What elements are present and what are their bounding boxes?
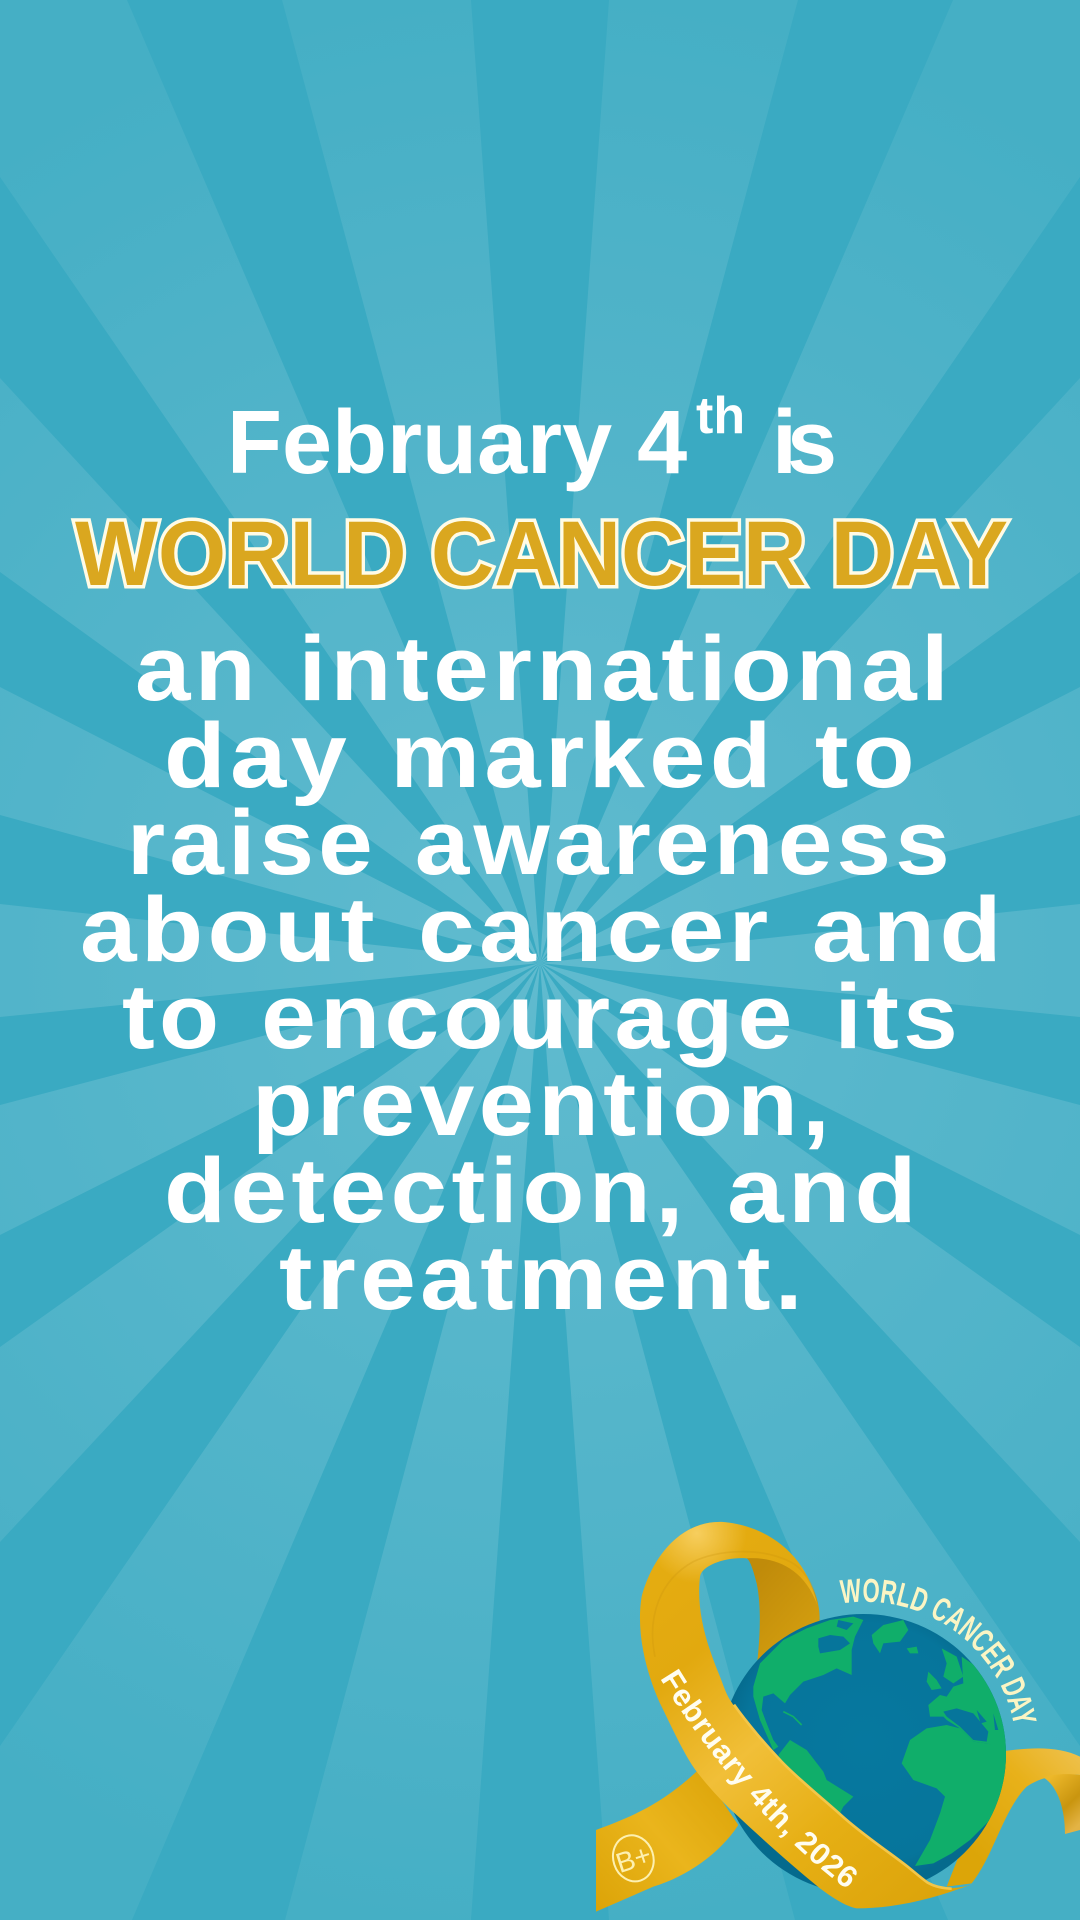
text block: description [80,618,1006,1329]
text block: description: to encourage its [122,966,962,1068]
ribbon: inner crease [653,1552,817,1657]
ribbon: left tail [596,1768,738,1912]
ribbon text: February 4th, 2026: February 4th, 2026 [661,1668,857,1887]
logo: B+ [607,1830,660,1887]
text block: description: treatment. [279,1227,807,1329]
text block: description: prevention, [252,1053,834,1155]
arc text: World Cancer Day: WORLD CANCER DAY [839,1578,1037,1722]
ribbon: light rim along inner edge [734,1705,952,1889]
globe [721,1614,1010,1894]
heading: February 4th is: th [696,387,745,445]
ribbon: back of loop [720,1551,820,1667]
logo: B+: B+ [612,1839,655,1879]
heading: World Cancer Day: WORLD CANCER DAY [75,503,1008,605]
text block: description: raise awareness [127,792,954,894]
text block: description: detection, and [164,1140,921,1242]
text block: description: about cancer and [80,879,1006,981]
emblem: ribbon and globe [596,1522,1080,1912]
globe: land masses [753,1617,1010,1866]
heading: February 4th is: February 4 [227,393,687,493]
text block: description: day marked to [164,705,919,807]
ribbon: right tail [947,1748,1080,1887]
ribbon: right tail fold [1043,1774,1080,1834]
heading: February 4th is: is [757,393,834,493]
text block: description: an international [135,618,953,720]
ribbon: top highlight [660,1522,742,1578]
ribbon: front band [640,1522,972,1908]
